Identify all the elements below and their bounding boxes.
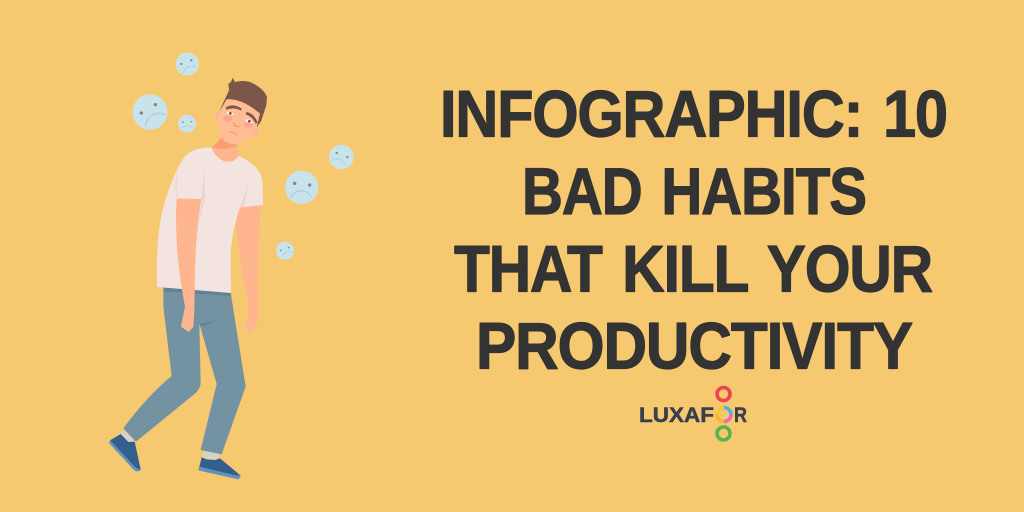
title line 2: BAD HABITS [522,154,866,228]
neck [212,137,238,162]
logo: Luxafor [639,388,747,440]
logo wordmark [639,404,747,427]
right shoe [198,457,240,479]
neck shadow [212,139,237,149]
icon: sad face 1 [176,52,199,76]
shirt folds [176,167,248,227]
hair [219,78,267,127]
eyes [226,112,253,123]
logo wordmark: R [734,404,747,427]
logo ring: red [717,388,730,400]
man figure [109,78,267,479]
logo wordmark: LUXAF [639,404,714,427]
icon: sad face 2 [132,94,168,130]
title line 4: PRODUCTIVITY [476,308,912,382]
logo ring: multicolour [717,408,731,422]
face [218,95,261,144]
cheeks [223,116,232,122]
title line 1: INFOGRAPHIC: 10 [440,76,947,150]
shirt [157,147,263,293]
ears [215,111,258,137]
left arm [176,198,201,332]
nose and mouth [229,122,240,135]
icon: sad face 3 [178,115,196,133]
title line 3: THAT KILL YOUR [454,232,932,306]
trouser shading [163,287,231,326]
eyebrows [226,105,258,124]
logo ring: green [717,427,730,440]
socks [120,430,220,459]
trousers [123,288,246,454]
title [440,76,947,382]
icon: sad face 6 [276,242,294,260]
head [212,78,267,149]
left shoe [109,434,141,471]
right arm [236,205,261,333]
icon: sad face 4 [329,145,354,169]
icon: sad face 5 [285,171,318,204]
illustration: tired man with sad faces [109,52,354,479]
